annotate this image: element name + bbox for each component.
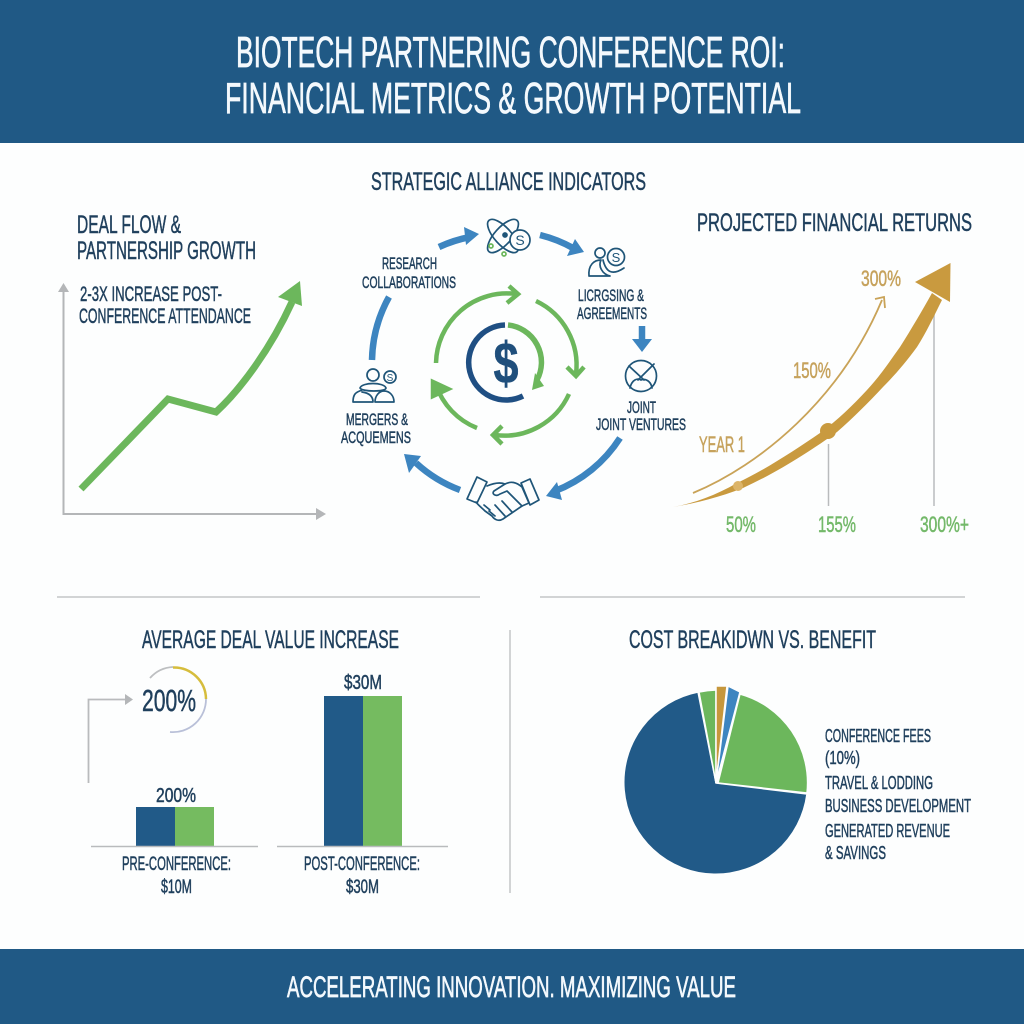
pie chart [624, 686, 808, 874]
panel: projected financial returns [673, 209, 972, 537]
label: pre-conference: PRE-CONFERENCE: [122, 854, 231, 875]
text: increase note: 2-3X INCREASE POST- [80, 283, 222, 306]
text: increase note: CONFERENCE ATTENDANCE [79, 305, 251, 328]
labels: gold percentages: 300% [861, 266, 901, 291]
footer banner [0, 949, 1024, 1024]
label: post-conference: $30M [346, 877, 379, 898]
icon: person and coin: S [612, 250, 621, 265]
heading: deal flow [77, 211, 256, 265]
label: joint ventures: JOINT VENTURES [596, 415, 686, 434]
progress ring with 200 percent: 200% [142, 683, 196, 718]
pie legend [825, 726, 971, 863]
thin gold arrow [693, 297, 885, 493]
outer blue cycle arrows [372, 227, 652, 500]
icon: people and coin [353, 369, 396, 402]
label: joint ventures [596, 398, 686, 434]
inner green cycle arrows [433, 286, 584, 444]
drop lines [828, 300, 934, 506]
panel: average deal value increase [88, 626, 448, 898]
labels: green percentages [726, 512, 969, 537]
icon: atom and coin [483, 215, 530, 257]
label: research collaborations: RESEARCH [382, 254, 437, 273]
panel: cost breakdown vs benefit [624, 626, 971, 874]
label: pre-conference: $10M [161, 877, 192, 898]
label: licensing and agreements: AGREEMENTS [577, 304, 647, 323]
footer tagline: ACCELERATING INNOVATION. MAXIMIZING VALUE [287, 971, 736, 1004]
labels: gold percentages [699, 266, 901, 457]
icon: handshake [467, 477, 539, 520]
heading: average deal value: AVERAGE DEAL VALUE INCREASE [142, 626, 399, 654]
pie legend: CONFERENCE FEES [825, 726, 931, 746]
panel: deal flow and partnership growth [58, 211, 326, 520]
label: post-conference: POST-CONFERENCE: [304, 854, 420, 875]
labels: green percentages: 155% [818, 512, 856, 537]
pie legend: (10%) [825, 748, 860, 768]
label: mergers and acquisitions: ACQUEMENS [341, 428, 411, 447]
label: licensing and agreements: LICRGSING & [578, 286, 644, 305]
label: research collaborations: COLLABORATIONS [362, 273, 456, 292]
label: pre-conference [122, 854, 231, 898]
labels: gold percentages: YEAR 1 [699, 432, 745, 457]
heading: strategic alliance: STRATEGIC ALLIANCE INDICATORS [371, 168, 646, 196]
labels: green percentages: 50% [726, 512, 756, 537]
icon: joint ventures circle [626, 360, 656, 392]
label: joint ventures: JOINT [627, 398, 656, 417]
bar: pre-conference [136, 785, 214, 846]
icon: person and coin [589, 248, 624, 276]
label: post-conference [304, 854, 420, 898]
label: licensing and agreements [577, 286, 647, 323]
panel: strategic alliance indicators [341, 168, 686, 520]
labels: gold percentages: 150% [793, 358, 831, 383]
header banner [0, 0, 1024, 143]
progress ring with 200 percent [142, 667, 206, 732]
pie legend: GENERATED REVENUE [825, 821, 950, 841]
heading: cost breakdown: COST BREAKIDWN VS. BENEFIT [629, 626, 876, 654]
growth line arrow [81, 281, 302, 489]
label: mergers and acquisitions [341, 410, 411, 447]
pie legend: TRAVEL & LODDING [825, 773, 933, 793]
label: mergers and acquisitions: MERGERS & [346, 410, 408, 429]
text: increase note [79, 283, 251, 328]
heading: deal flow: DEAL FLOW & [77, 211, 181, 239]
bar: post-conference [324, 672, 402, 846]
thick gold arrow [673, 263, 950, 507]
bar: post-conference: $30M [344, 672, 382, 694]
heading: deal flow: PARTNERSHIP GROWTH [77, 237, 256, 265]
title [225, 28, 801, 123]
bar: pre-conference: 200% [156, 785, 196, 807]
labels: green percentages: 300%+ [920, 512, 969, 537]
icon: atom and coin: S [515, 232, 525, 248]
chart axes [58, 283, 326, 520]
central dollar icon [469, 325, 544, 400]
label: research collaborations [362, 254, 456, 292]
icon: people and coin: S [387, 373, 394, 384]
gray connector arrow [88, 694, 133, 783]
central dollar icon: $ [494, 331, 518, 396]
pie legend: & SAVINGS [825, 843, 886, 863]
